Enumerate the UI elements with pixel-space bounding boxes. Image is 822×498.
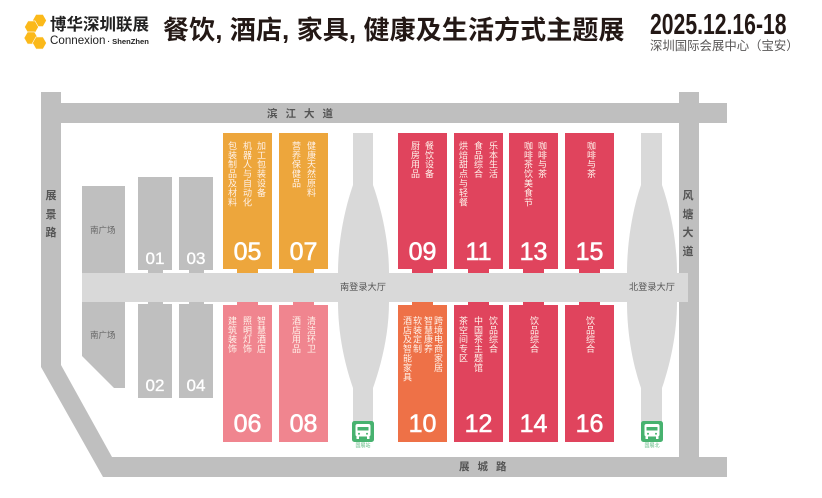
- hall 09 categories: 厨房用品: [410, 141, 420, 179]
- hall 08: [279, 305, 328, 442]
- hall 10 categories: [402, 316, 443, 382]
- hall 01: [138, 177, 172, 270]
- hall 09: [398, 133, 447, 269]
- hall 06: [223, 305, 272, 442]
- hall 05 categories: 加工包装设备: [256, 141, 266, 197]
- hall 13 categories: [523, 141, 547, 207]
- hall 16: [565, 305, 614, 442]
- icon: south metro station: [352, 421, 374, 442]
- hall 08 categories: [291, 316, 316, 354]
- hall 05: [223, 133, 272, 269]
- number 05: 05: [234, 238, 261, 266]
- number 02: 02: [146, 376, 164, 395]
- number 12: 12: [465, 410, 492, 438]
- north hall label: 北登录大厅: [629, 282, 675, 292]
- hall 05 categories: [227, 141, 266, 207]
- hall 13 categories: 咖啡茶饮美食节: [523, 141, 533, 207]
- number 13: 13: [520, 238, 547, 266]
- venue: 深圳国际会展中心（宝安）: [650, 39, 799, 53]
- hall 09 categories: 餐饮设备: [424, 141, 434, 179]
- hall 14 categories: 饮品综合: [529, 316, 539, 354]
- south hall concourse: [338, 133, 389, 425]
- number 04: 04: [187, 376, 205, 395]
- north hall concourse: [627, 133, 677, 425]
- hall 06 categories: 智慧酒店: [256, 316, 266, 354]
- hall 09 categories: [410, 141, 434, 179]
- hall 08 categories: 酒店用品: [291, 316, 301, 354]
- hall 16 categories: 饮品综合: [585, 316, 595, 354]
- hall 11: [454, 133, 503, 269]
- hall 06 categories: 照明灯饰: [242, 316, 252, 354]
- title: 餐饮, 酒店, 家具, 健康及生活方式主题展: [163, 15, 625, 45]
- number 09: 09: [409, 238, 436, 266]
- number 07: 07: [290, 238, 317, 266]
- hall 12 categories: 饮品综合: [488, 316, 498, 354]
- number 06: 06: [234, 410, 261, 438]
- hall 07 categories: 营养保健品: [291, 141, 301, 188]
- hall 11 categories: 食品综合: [473, 141, 483, 179]
- north metro label: 国展北: [644, 443, 660, 449]
- hall 12 categories: 茶空间专区: [458, 316, 468, 363]
- hall 12: [454, 305, 503, 442]
- hall 07 categories: [291, 141, 316, 197]
- hall 10 categories: 智慧康养: [423, 316, 433, 354]
- hall 06 categories: [227, 316, 266, 354]
- number 10: 10: [409, 410, 436, 438]
- hall 02: [138, 304, 172, 398]
- hall 11 categories: 乐本生活: [488, 141, 498, 179]
- road label: top: 滨江大道: [267, 108, 341, 120]
- hall 15 categories: 咖啡与茶: [586, 141, 596, 179]
- hall 11 categories: 烘焙甜点与轻餐: [458, 141, 468, 207]
- hall 10 categories: 跨境电商家居: [433, 316, 443, 372]
- logo english: Connexion · ShenZhen: [50, 34, 149, 47]
- plaza label: upper: 南广场: [90, 225, 116, 235]
- hall 14: [509, 305, 558, 442]
- hall 10: [398, 305, 447, 442]
- central corridor: [82, 273, 688, 302]
- hall 10 categories: 软装定制: [412, 316, 422, 354]
- south metro label: 国展站: [355, 443, 370, 449]
- south hall label: 南登录大厅: [340, 282, 386, 292]
- hall 13: [509, 133, 558, 269]
- plaza label: lower: 南广场: [90, 330, 116, 340]
- road label: bottom: 展城路: [459, 461, 514, 473]
- hall 10 categories: 酒店及智能家具: [402, 316, 412, 382]
- hall 05 categories: 包装制品及材料: [227, 141, 237, 207]
- number 16: 16: [576, 410, 603, 438]
- number 08: 08: [290, 410, 317, 438]
- icon: honeycomb: [24, 14, 46, 50]
- icon: north metro station: [641, 421, 663, 442]
- hall 07: [279, 133, 328, 269]
- road label: right: 风塘大道: [682, 190, 694, 258]
- logo: [24, 14, 149, 50]
- number 03: 03: [187, 249, 205, 268]
- hall 07 categories: 健康天然原料: [306, 141, 316, 197]
- logo name: 博华深圳联展: [50, 16, 149, 34]
- hall 06 categories: 建筑装饰: [227, 316, 237, 354]
- hall 05 categories: 机器人与自动化: [242, 141, 252, 207]
- number 14: 14: [520, 410, 547, 438]
- hall 03: [179, 177, 213, 270]
- hall 13 categories: 咖啡与茶: [537, 141, 547, 179]
- hall 12 categories: 中国茶主题馆: [473, 316, 483, 372]
- hall 08 categories: 清洁环卫: [306, 316, 316, 354]
- road label: left: 展景路: [46, 190, 56, 239]
- hall 04: [179, 304, 213, 398]
- hall 15: [565, 133, 614, 269]
- number 01: 01: [146, 249, 164, 268]
- number 15: 15: [576, 238, 603, 266]
- date: 2025.12.16-18: [650, 9, 787, 41]
- hall 11 categories: [458, 141, 498, 207]
- hall 12 categories: [458, 316, 498, 372]
- south plaza shapes: [82, 186, 125, 388]
- number 11: 11: [466, 238, 491, 266]
